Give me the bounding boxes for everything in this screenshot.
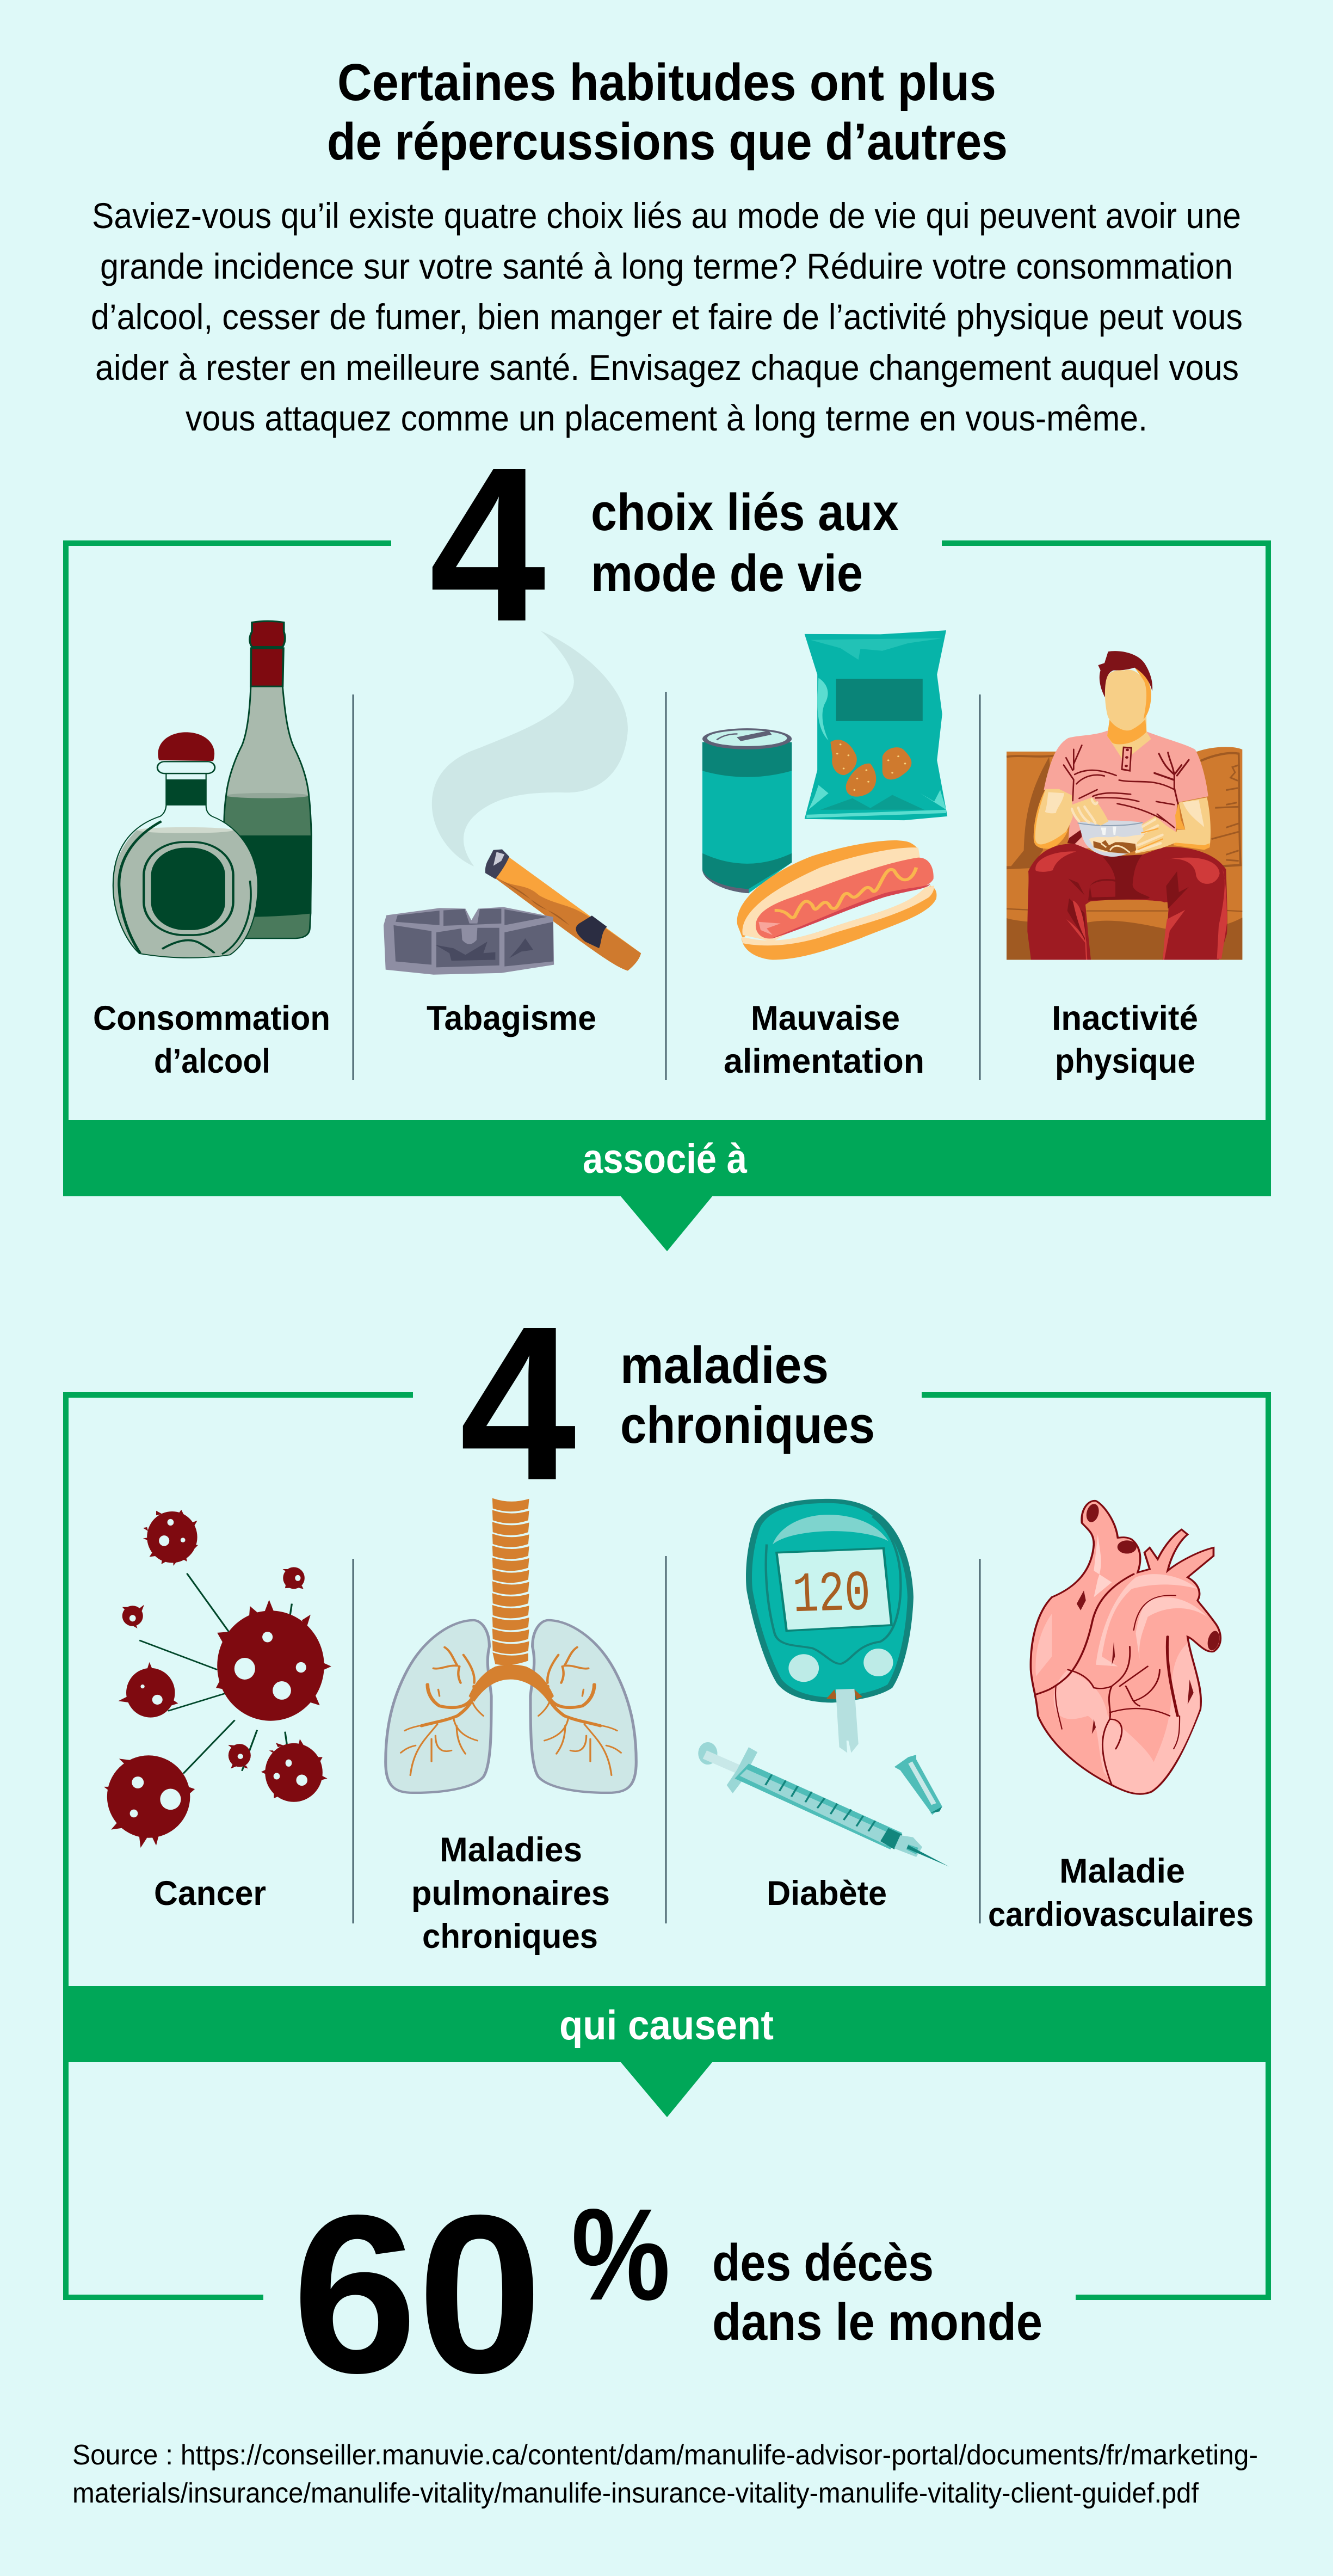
label: Maladie cardiovasculaires: Maladie [1059, 1852, 1185, 1890]
label: Inactivité physique: Inactivité [1052, 999, 1198, 1037]
icon: cancer cells [104, 1510, 331, 1848]
label: Mauvaise alimentation [724, 999, 924, 1080]
label: Maladies pulmonaires chroniques: chroniques [422, 1917, 598, 1956]
icon: lungs and trachea [386, 1499, 636, 1793]
heading: maladies chroniques: chroniques [620, 1396, 875, 1454]
label: Maladies pulmonaires chroniques: pulmonaires [411, 1874, 610, 1913]
icon: chips bag, can and hot dog [702, 630, 947, 960]
source text: materials/insurance/manulife-vitality/manulife-insurance-vitality-manulife-vitality-client-guidef.pdf [72, 2477, 1199, 2509]
panel: 4 chronic diseases frame [66, 1395, 1268, 2297]
label: Maladie cardiovasculaires [988, 1852, 1254, 1934]
label: Cancer: Cancer [154, 1874, 266, 1913]
heading: choix liés aux mode de vie [591, 483, 899, 602]
title: Certaines habitudes ont plus [337, 53, 996, 112]
intro text block: aider à rester en meilleure santé. Envisagez chaque changement auquel vous [95, 347, 1239, 388]
heading: choix liés aux mode de vie: mode de vie [591, 544, 863, 602]
icon: glucose meter and syringe: 120 [792, 1562, 872, 1628]
dividers row 2 [353, 1556, 980, 1923]
heading: maladies chroniques: maladies [620, 1336, 829, 1394]
label: Consommation d'alcool: Consommation [93, 999, 330, 1037]
label: Consommation d'alcool [93, 999, 330, 1080]
label: Inactivité physique: physique [1055, 1042, 1195, 1080]
intro text block: d’alcool, cesser de fumer, bien manger et faire de l’activité physique peut vous [91, 297, 1243, 337]
icon: glucose meter and syringe [698, 1499, 949, 1866]
intro text block: vous attaquez comme un placement à long terme en vous-même. [186, 398, 1147, 438]
heading: choix liés aux mode de vie: choix liés aux [591, 483, 899, 542]
panel: 4 lifestyle choices frame [66, 543, 1268, 1121]
text: des décès dans le monde: des décès [712, 2234, 934, 2292]
big number 4 choices: 4 [429, 421, 547, 667]
source text: Source : https://conseiller.manuvie.ca/content/dam/manulife-advisor-portal/documents/fr/marketing- [72, 2439, 1258, 2471]
label: Mauvaise alimentation: alimentation [724, 1042, 924, 1080]
big statistic 60 % [292, 2168, 670, 2420]
banner: associé à [63, 1120, 1271, 1251]
banner: qui causent: qui causent [559, 2002, 774, 2049]
big statistic 60 %: % [571, 2181, 670, 2327]
icon: heart [1030, 1501, 1221, 1794]
label: Maladies pulmonaires chroniques: Maladies [440, 1831, 582, 1869]
title [327, 53, 1008, 171]
text: des décès dans le monde [712, 2234, 1042, 2351]
intro text block: Saviez-vous qu’il existe quatre choix liés au mode de vie qui peuvent avoir une [92, 195, 1241, 236]
big number 4 diseases: 4 [460, 1280, 577, 1526]
source text [72, 2439, 1258, 2509]
title: de répercussions que d’autres [327, 113, 1008, 171]
label: Inactivité physique [1052, 999, 1198, 1080]
banner: associé à: associé à [583, 1136, 748, 1182]
intro text block: grande incidence sur votre santé à long terme? Réduire votre consommation [100, 246, 1233, 286]
text: des décès dans le monde: dans le monde [712, 2293, 1042, 2351]
dividers row 1 [353, 692, 980, 1080]
label: Diabète: Diabète [767, 1874, 887, 1913]
label: Maladie cardiovasculaires: cardiovasculaires [988, 1896, 1254, 1934]
label: Mauvaise alimentation: Mauvaise [751, 999, 900, 1037]
heading: maladies chroniques [620, 1336, 875, 1454]
intro text block [91, 195, 1243, 438]
banner: qui causent [63, 1986, 1271, 2117]
label: Tabagisme: Tabagisme [427, 999, 596, 1037]
icon: alcohol bottles [113, 621, 311, 958]
big statistic 60 %: 60 [292, 2168, 542, 2420]
label: Consommation d'alcool: d’alcool [154, 1042, 270, 1080]
icon: man eating on sofa [1007, 651, 1242, 960]
icon: smoke, cigarette and ashtray [384, 631, 641, 975]
label: Maladies pulmonaires chroniques [411, 1831, 610, 1956]
